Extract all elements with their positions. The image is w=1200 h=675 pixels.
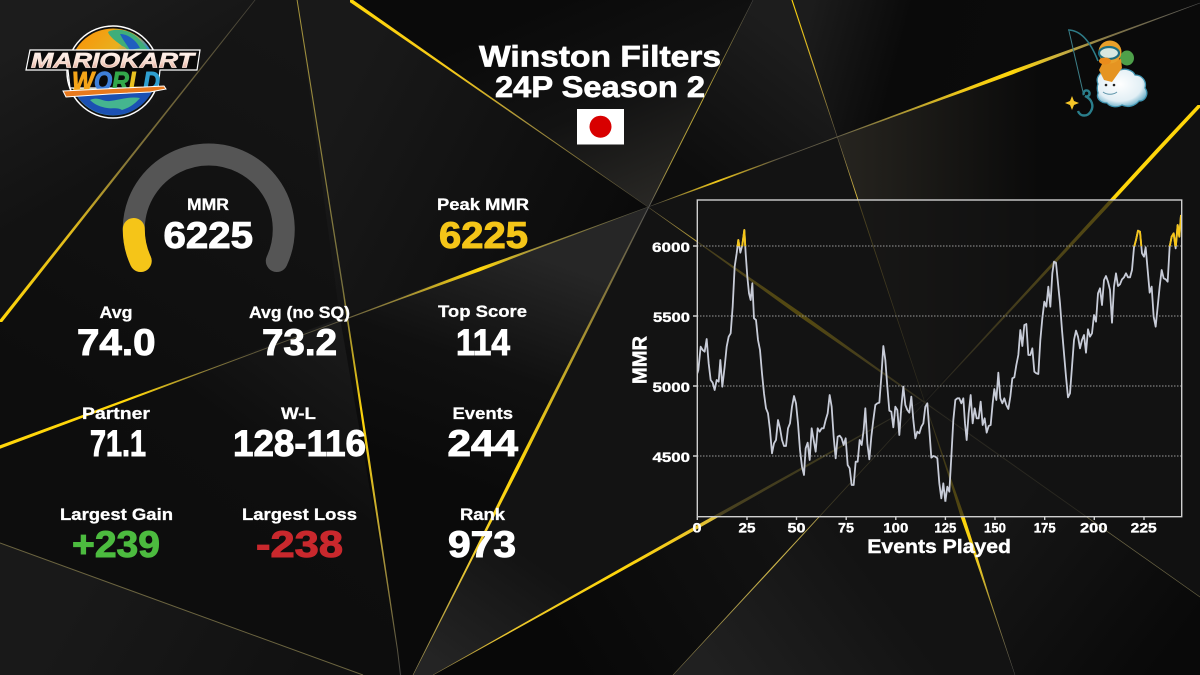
plot frame and tick marks: [693, 200, 1182, 520]
x axis tick labels: 100: [883, 520, 909, 536]
title: Winston Filters: [479, 40, 721, 74]
stat: Top Score: [438, 302, 527, 363]
stat: Largest Gain: Largest Gain: [60, 505, 173, 524]
x axis title: Events Played: [867, 536, 1011, 558]
icon: Japan flag: [577, 109, 624, 144]
stat: Peak MMR: 6225: [439, 215, 528, 256]
MMR history line: [697, 215, 1181, 502]
y axis tick labels: 4500: [652, 449, 690, 465]
stat: Rank: Rank: [460, 505, 506, 524]
stat: Largest Loss: -238: [256, 524, 343, 565]
stat: Largest Loss: Largest Loss: [242, 505, 357, 524]
stat: Partner: Partner: [82, 404, 150, 423]
x axis tick labels: 25: [738, 520, 756, 536]
gauge: MMR: MMR: [187, 195, 229, 214]
stat: Partner: 71.1: [90, 423, 146, 464]
logo: Mario Kart World: WORLD: [72, 66, 160, 96]
stat: Peak MMR: Peak MMR: [437, 195, 529, 214]
x axis tick labels: 150: [984, 520, 1006, 536]
stat: W-L: [233, 404, 366, 464]
x axis tick labels: 175: [1034, 520, 1056, 536]
x axis tick labels: [692, 520, 1157, 536]
stat: Partner: [82, 404, 150, 464]
x axis tick labels: 75: [838, 520, 854, 536]
stat: Largest Loss: [242, 505, 357, 565]
stat: Events: Events: [452, 404, 513, 423]
x axis tick labels: 0: [692, 520, 702, 536]
y axis tick labels: [652, 239, 690, 465]
stat: Rank: 973: [448, 524, 516, 565]
y axis title: MMR: [630, 335, 652, 384]
stat: W-L: W-L: [281, 404, 316, 423]
stat: Largest Gain: +239: [72, 524, 160, 565]
y axis tick labels: 6000: [652, 239, 690, 255]
stat: Largest Gain: [60, 505, 173, 565]
line chart: MMR over events played: [652, 200, 1182, 558]
y axis tick labels: 5500: [653, 309, 690, 325]
title: [479, 40, 721, 104]
stat: Peak MMR: [437, 195, 529, 256]
stat: Avg (no SQ): 73.2: [262, 322, 337, 363]
x axis tick labels: 50: [788, 520, 806, 536]
stat: W-L: 128-116: [233, 423, 366, 464]
stat: Avg (no SQ): Avg (no SQ): [249, 303, 350, 322]
stat: Rank: [448, 505, 516, 565]
stat: Avg (no SQ): [249, 303, 350, 363]
y axis tick labels: 5000: [652, 379, 690, 395]
x axis tick labels: 225: [1131, 520, 1157, 536]
logo: Mario Kart World: [26, 26, 200, 118]
peak segments highlighted in yellow: [736, 214, 1181, 246]
gauge: MMR: [134, 154, 284, 261]
stat: Avg: [77, 303, 156, 363]
stat: Top Score: 114: [456, 322, 510, 363]
x axis tick labels: 200: [1080, 520, 1108, 536]
x axis tick labels: 125: [934, 520, 957, 536]
stat: Events: [448, 404, 518, 464]
title: 24P Season 2: [495, 71, 705, 104]
stat: Top Score: Top Score: [438, 302, 527, 321]
gauge: MMR: 6225: [164, 215, 253, 256]
logo: Mario Kart World: MARIOKART: [31, 50, 197, 72]
stat: Avg: 74.0: [77, 322, 156, 363]
icon: fishing Lakitu on a cloud: [1065, 30, 1147, 116]
stat: Events: 244: [448, 423, 518, 464]
stat: Avg: Avg: [100, 303, 132, 322]
